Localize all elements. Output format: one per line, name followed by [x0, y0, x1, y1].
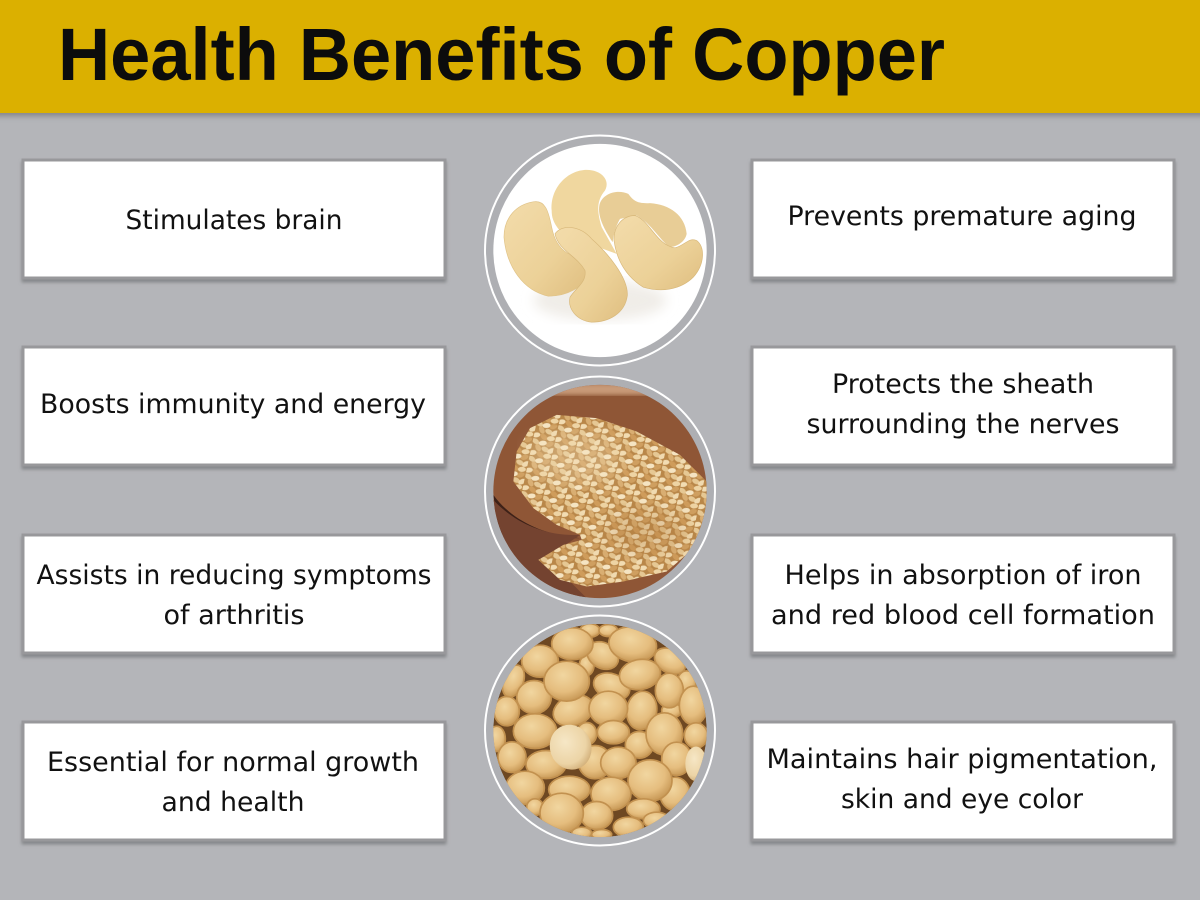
panel: iron absorption: Helps in absorption of iron — [784, 560, 1142, 591]
panel: arthritis: of arthritis — [164, 600, 304, 631]
title: Health Benefits of Copper — [58, 13, 945, 96]
panel: iron absorption — [752, 535, 1174, 653]
panel: premature aging: Prevents premature aging — [788, 201, 1136, 232]
panel: growth: and health — [162, 787, 304, 818]
icon: cashews — [485, 135, 715, 365]
panel: arthritis — [23, 535, 445, 653]
panel: boosts immunity — [23, 347, 445, 465]
panel: nerve sheath: Protects the sheath — [832, 369, 1094, 400]
panel: stimulates brain: Stimulates brain — [126, 205, 342, 236]
panel: nerve sheath — [752, 347, 1174, 465]
panel: nerve sheath: surrounding the nerves — [806, 409, 1120, 440]
panel: iron absorption: and red blood cell formation — [771, 600, 1155, 631]
header band — [0, 0, 1200, 113]
panel: hair pigmentation: Maintains hair pigmentation, — [766, 744, 1158, 775]
panel: hair pigmentation — [752, 722, 1174, 840]
panel: growth: Essential for normal growth — [47, 747, 419, 778]
icon: soybeans — [485, 615, 715, 845]
panel: hair pigmentation: skin and eye color — [841, 784, 1083, 815]
panel: arthritis: Assists in reducing symptoms — [36, 560, 432, 591]
panel: stimulates brain — [23, 160, 445, 278]
panel: growth — [23, 722, 445, 840]
icon: sesame seeds — [485, 376, 715, 606]
panel: premature aging — [752, 160, 1174, 278]
panel: boosts immunity: Boosts immunity and energy — [40, 389, 426, 420]
